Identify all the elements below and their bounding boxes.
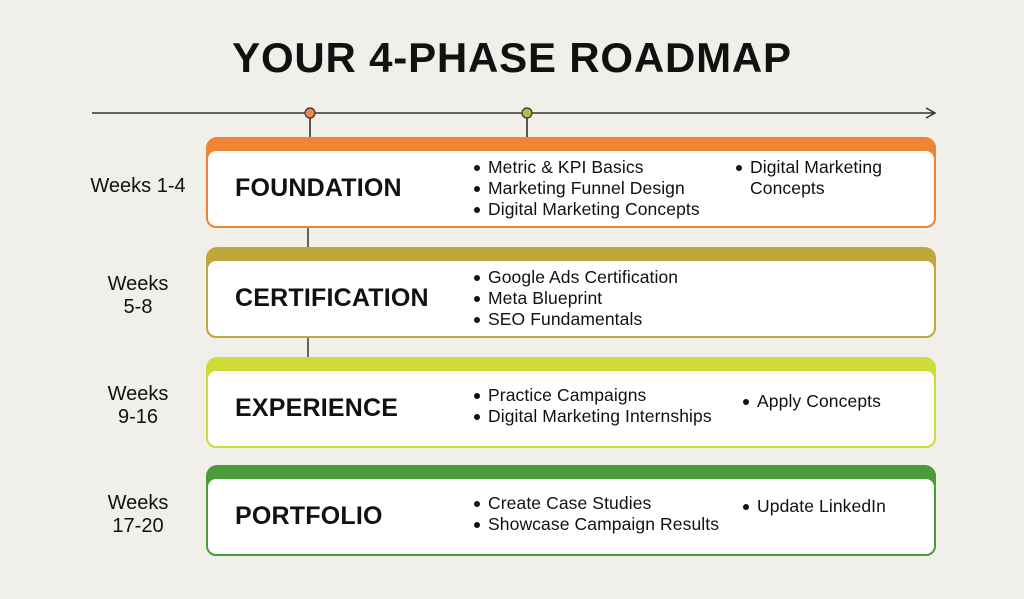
weeks labels: Weeks 1-4 <box>90 175 186 197</box>
panel: certification <box>206 247 936 338</box>
panel: certification: SEO Fundamentals <box>488 309 642 329</box>
title: YOUR 4-PHASE ROADMAP <box>232 34 792 81</box>
panel: foundation: Digital Marketing <box>750 157 882 177</box>
panel: foundation: Digital Marketing Concepts <box>488 199 700 219</box>
panel: foundation <box>206 137 936 228</box>
panel: portfolio: PORTFOLIO <box>235 502 383 530</box>
text: Weeks <box>108 383 168 405</box>
panel: portfolio: Update LinkedIn <box>757 496 886 516</box>
panel: certification: Meta Blueprint <box>488 288 602 308</box>
panel: foundation: FOUNDATION <box>235 174 402 202</box>
panel: portfolio <box>206 465 936 556</box>
panel: experience: EXPERIENCE <box>235 394 398 422</box>
panel: certification: CERTIFICATION <box>235 284 429 312</box>
panel: foundation: Metric & KPI Basics <box>488 157 644 177</box>
text: 5-8 <box>124 296 152 318</box>
panel: experience: Apply Concepts <box>757 391 881 411</box>
panel: portfolio: Showcase Campaign Results <box>488 514 719 534</box>
text: 17-20 <box>112 515 164 537</box>
text: Weeks <box>108 492 168 514</box>
panel: portfolio: Create Case Studies <box>488 493 651 513</box>
panel: experience: Practice Campaigns <box>488 385 646 405</box>
panel: foundation: Marketing Funnel Design <box>488 178 685 198</box>
text: Weeks <box>108 273 168 295</box>
panel: experience: Digital Marketing Internships <box>488 406 712 426</box>
panel: certification: Google Ads Certification <box>488 267 678 287</box>
panel: experience <box>206 357 936 448</box>
panel: foundation: Concepts <box>750 178 825 198</box>
text: 9-16 <box>118 406 158 428</box>
